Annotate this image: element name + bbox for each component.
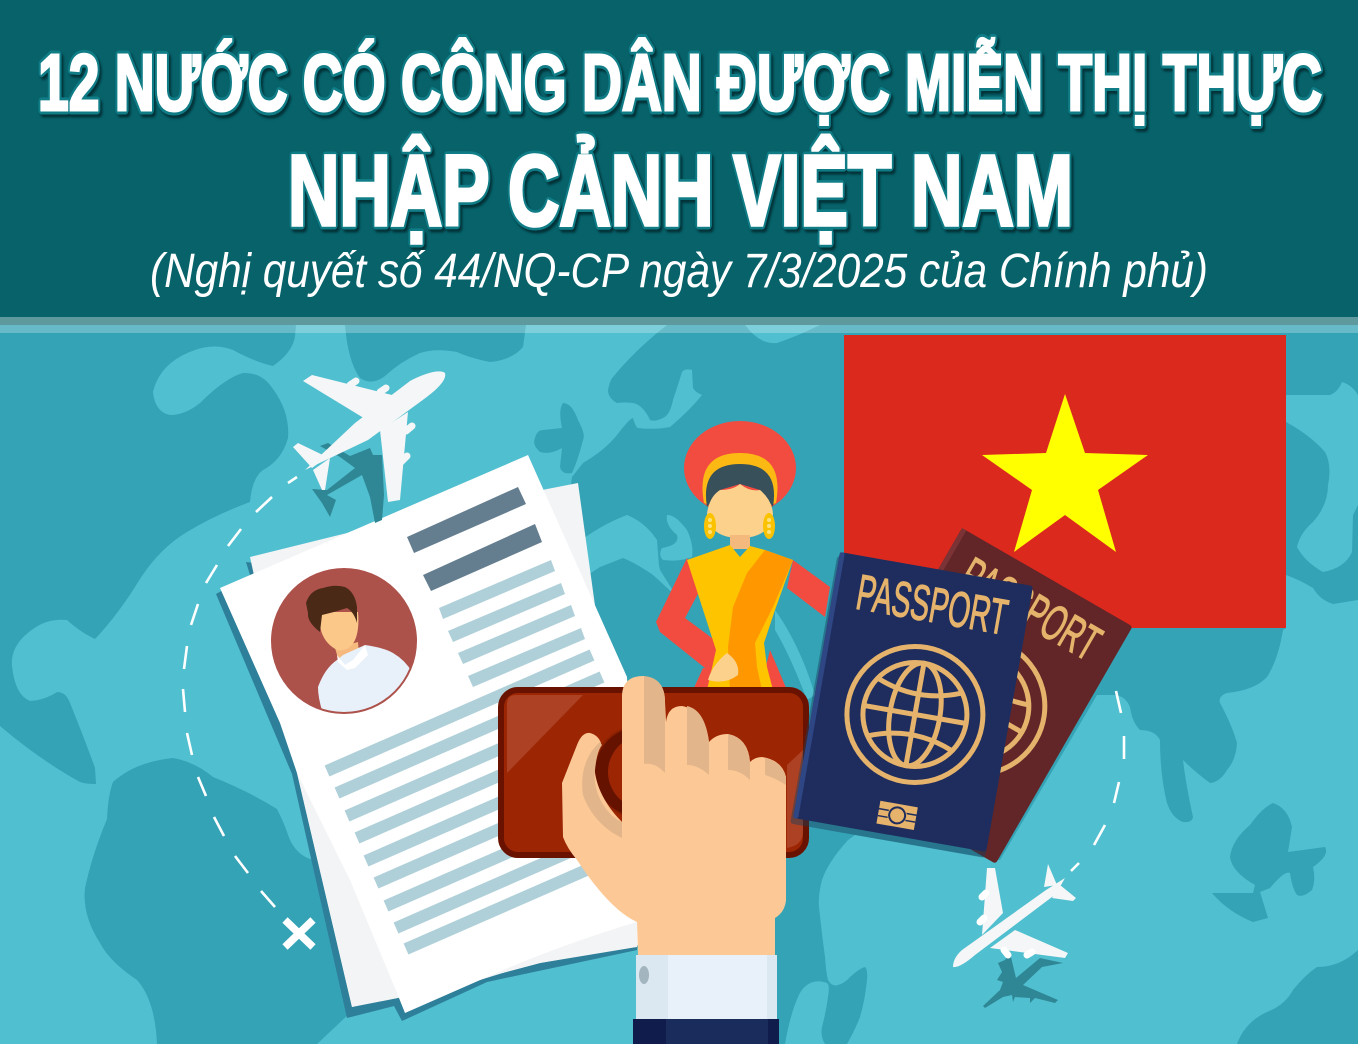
sleeves: [656, 558, 735, 680]
stamp: [501, 690, 806, 855]
dress: [687, 545, 793, 690]
header band: [0, 0, 1358, 333]
maroon passport globe: [884, 613, 1070, 799]
subtitle: (Nghị quyết số 44/NQ-CP ngày 7/3/2025 của Chính phủ): [150, 245, 1208, 298]
shirt cuff: [636, 955, 777, 1019]
light bay right of flag: [1286, 382, 1358, 572]
continent: bottom right: [1237, 950, 1358, 1044]
background map: [0, 317, 1358, 1044]
paper shadow: [216, 562, 640, 1021]
headdress: [684, 421, 796, 515]
hair: [706, 464, 774, 507]
blue passport globe: [836, 636, 994, 793]
airplane shadow bottom: [983, 953, 1063, 1008]
heading bars: [407, 487, 542, 591]
airplane shadow top: [312, 443, 384, 523]
suit sleeve: [633, 1019, 779, 1044]
light wisps near woman: [660, 515, 692, 561]
maroon passport: [825, 528, 1133, 864]
stamp knob: [593, 725, 687, 819]
hand: [708, 653, 738, 682]
finger shading: [582, 676, 786, 838]
hand: [562, 676, 786, 955]
earrings: [704, 513, 775, 539]
flight path dashes right: [1071, 691, 1124, 871]
paper fold: [487, 922, 637, 977]
maroon passport label: PASSPORT: [951, 547, 1110, 671]
blue passport: [790, 552, 1033, 858]
flag star: [982, 394, 1148, 552]
flight path dashes left: [183, 477, 297, 907]
woman in ao dai: [656, 421, 830, 690]
destination cross: [285, 920, 313, 947]
portrait: [271, 568, 417, 720]
face: [707, 484, 773, 538]
continent: upper left: [0, 325, 296, 784]
continent: central: [560, 325, 1358, 1044]
stamp highlights: [507, 695, 583, 773]
short text lines: [439, 560, 585, 687]
title: [38, 38, 1322, 247]
flag of Vietnam: [844, 335, 1286, 628]
blue passport chip: [876, 801, 918, 830]
continent: bottom left: [85, 758, 350, 1044]
continent: right small island: [1212, 803, 1326, 922]
airplane top: [293, 371, 445, 502]
continent: small top island: [345, 325, 526, 382]
long text lines: [327, 655, 671, 949]
blue passport label: PASSPORT: [853, 564, 1012, 646]
continent: small island by paper: [534, 403, 584, 473]
cuff button: [639, 966, 649, 984]
front paper: [220, 455, 640, 1013]
papers: [216, 455, 671, 1021]
blue passport shadow: [790, 556, 1032, 858]
light patch behind paper: [575, 515, 660, 580]
back paper: [250, 483, 640, 1007]
airplane bottom: [953, 864, 1076, 967]
